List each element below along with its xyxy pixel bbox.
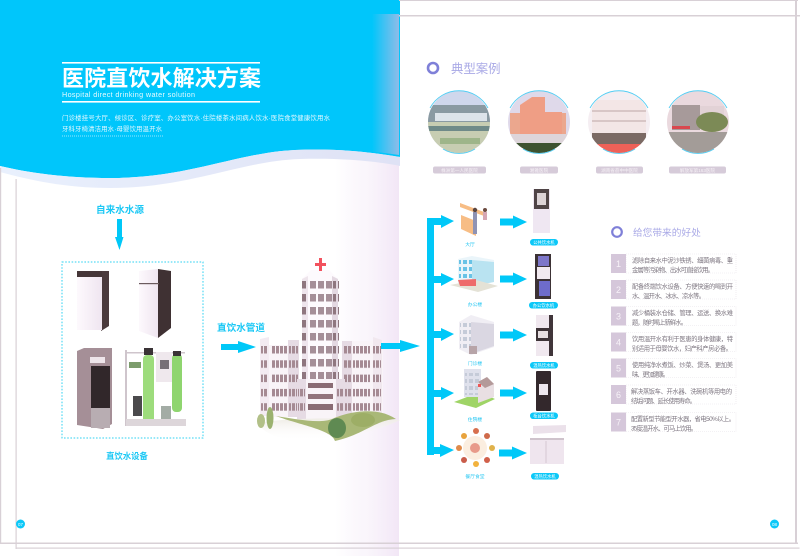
label: office: 办公楼 [468,301,482,308]
arrow: source down to equipment [115,219,124,250]
case photo 2 [508,91,570,153]
benefit 7 [611,412,736,432]
label: equipment: 直饮水设备 [106,451,149,461]
benefit 1: 1 [616,259,621,269]
page number 08 [770,520,779,528]
equipment cabinet 1 [77,271,109,331]
label: lobby: 大厅 [465,241,475,248]
benefit 2 [611,280,736,300]
hospital illustration [257,258,400,441]
equipment cabinet 3 [77,348,112,429]
pill: warm dispenser [530,362,558,369]
benefit 7: 配置新型节能型开水器，省电50%以上。 [631,414,735,423]
benefit 4: 别适用于母婴饮水，妇产科产房必备。 [632,344,732,352]
benefit 3: 减少桶装水仓储、管理、运送、换水难 [632,308,734,317]
description text: 牙科牙椅清洁用水·母婴饮用温开水 [62,124,163,133]
label: pipeline: 直饮水管道 [217,322,265,334]
case captions: 湖南省荔中中医院 [601,167,638,174]
arrows to dispensers [499,216,527,460]
dispenser 5 [530,425,566,464]
dispenser 3 [536,315,553,356]
pill: office dispenser [529,302,558,309]
benefit 3: 3 [616,312,621,322]
equipment cabinet 2 [139,269,171,338]
icon: outpatient building [459,315,494,355]
case captions: 解放军第163医院 [680,167,716,174]
benefit 5: 味、更加健康。 [632,370,669,378]
pill: warm dispenser: 温热饮水机 [533,362,555,369]
branch arrows to buildings [427,215,454,457]
case photo 4 [667,91,729,153]
section heading: benefits [612,226,701,239]
left wing [260,337,299,417]
benefit 5: 5 [616,364,621,374]
icon: canteen [456,428,495,467]
benefit 2: 2 [616,285,621,295]
flow main trunk [427,218,434,455]
benefit 7: 35度温开水、可马上饮用。 [631,424,697,432]
icon: lobby [460,203,487,236]
arrow: hospital out to branches [381,340,420,352]
benefit 2: 水、温开水、冰水、凉水等。 [632,291,705,300]
arrow: pipeline into hospital [221,341,256,353]
benefit 6: 解决蒸饭车、开水器、洗碗机等用电的 [631,386,732,396]
title block: Hospital direct drinking water solution [62,90,195,99]
pill: office dispenser: 办公饮水机 [533,302,555,309]
page number 08: 08 [772,522,777,527]
description text [62,113,331,136]
benefit 2: 配备终端饮水设备、方便快速的喝到开 [632,282,733,290]
benefit 3 [611,306,736,326]
pill: public dispenser [530,239,558,246]
pill: public dispenser: 公共饮水机 [533,239,555,246]
benefit 6 [611,385,736,405]
label: canteen: 餐厅食堂 [465,473,485,480]
case photo 1 [428,91,490,153]
page number 07: 07 [18,522,23,527]
right wing [342,337,383,417]
icon: inpatient building [454,369,495,408]
benefits list [611,254,736,432]
pill: counter dispenser [530,412,558,420]
case photo 3 [588,91,650,153]
red cross [315,258,326,271]
benefit 6: 6 [616,390,621,400]
dispenser 2 [535,254,551,299]
section heading: benefits: 给您带来的好处 [633,226,701,239]
main tower [302,270,339,415]
page number 07 [16,520,25,528]
icon: office building [450,256,498,292]
pill: warm dispenser 2 [531,473,559,480]
case captions [433,166,726,174]
benefit 7: 7 [616,418,621,428]
pill: counter dispenser: 柜台饮水机 [533,412,555,420]
benefit 5: 使用纯净水煮饭、炒菜、煲汤、更加美 [632,360,734,369]
section heading: typical cases: 典型案例 [451,61,501,76]
benefit 1: 滤除自来水中泥沙铁锈、细菌病毒、重 [632,256,733,264]
section heading: typical cases [428,61,501,76]
benefit 3: 题，随时喝上新鲜水。 [632,318,687,326]
dispenser 1 [533,189,550,233]
centre fold shading [335,150,399,556]
label: outpatient: 门诊楼 [468,360,482,367]
benefit 4: 饮用温开水有利于医患的身体健康，特 [632,334,734,343]
label: tap water source: 自来水水源 [96,204,144,216]
top cyan banner with wave [0,0,400,188]
panel: equipment [62,262,203,438]
dispenser 4 [536,371,551,411]
case captions: 株洲第一人民医院 [441,167,478,174]
title block [62,62,261,103]
description text: 门诊楼挂号大厅、候诊区、诊疗室、办公室饮水·住院楼茶水间病人饮水·医院食堂健康饮用水 [62,113,331,122]
benefit 4: 4 [616,338,621,348]
pill: warm dispenser 2: 温热饮水机 [534,473,556,480]
label: inpatient: 住院楼 [468,416,482,423]
ground and foliage [257,407,400,441]
benefit 1: 金属等污染物、出水可直接饮用。 [632,265,714,274]
benefit 6: 结垢问题、延长使用寿命。 [631,396,696,405]
lobby [297,379,345,419]
equipment RO system [125,348,186,426]
benefit 1 [611,254,736,274]
benefit 4 [611,332,736,352]
benefit 5 [611,358,736,378]
title block: 医院直饮水解决方案 [62,66,261,91]
case captions: 湘雅医院 [530,167,549,174]
